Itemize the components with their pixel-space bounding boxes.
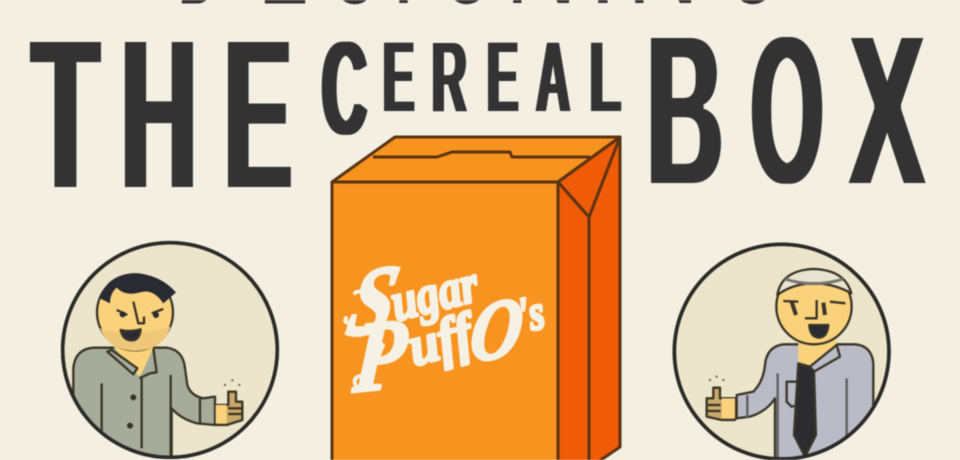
cereal box xyxy=(332,137,620,460)
box side xyxy=(558,137,620,460)
right hair xyxy=(777,269,851,295)
heading: designing (cropped at top) xyxy=(178,0,779,32)
EREAL xyxy=(383,20,621,135)
logo: Sugar Puff O's: ugar xyxy=(384,253,485,333)
right hand thumbs up xyxy=(707,388,735,420)
left collar xyxy=(107,348,157,378)
box top tab xyxy=(373,152,590,157)
logo: Sugar Puff O's: S xyxy=(339,243,408,358)
right tie xyxy=(794,363,816,457)
box front xyxy=(332,182,558,460)
EREAL: R xyxy=(432,20,467,134)
right face xyxy=(783,300,845,318)
left shirt xyxy=(73,348,215,460)
EREAL: E xyxy=(487,20,518,134)
left head xyxy=(97,274,173,350)
left sparkles xyxy=(225,379,239,386)
left neck xyxy=(113,347,153,377)
box side fold xyxy=(558,137,620,460)
logo: Sugar Puff O's: uff xyxy=(401,301,484,379)
logo: Sugar Puff O's: P xyxy=(350,298,411,415)
logo: Sugar Puff O's: 's xyxy=(513,283,549,343)
title: THE: E xyxy=(224,0,292,235)
EREAL: E xyxy=(383,20,414,134)
left hair xyxy=(100,273,176,303)
right sparkles xyxy=(710,376,723,381)
title: CEREAL xyxy=(322,14,621,164)
portrait: left man xyxy=(63,243,277,460)
logo: Sugar Puff O's xyxy=(339,243,549,415)
right collar xyxy=(810,345,840,372)
left hand thumbs up xyxy=(216,392,242,425)
left beard shadow xyxy=(100,327,171,351)
logo: Sugar Puff O's: O xyxy=(466,279,527,381)
EREAL: A xyxy=(536,20,570,134)
left face xyxy=(117,302,163,323)
right head xyxy=(776,269,852,344)
box top xyxy=(332,137,620,182)
title: THE: T xyxy=(32,0,99,236)
right shirt xyxy=(737,344,873,460)
right circle background xyxy=(674,244,889,459)
EREAL: L xyxy=(590,21,621,135)
logo swashes xyxy=(345,292,388,388)
title: BOX xyxy=(647,0,925,232)
left shirt details xyxy=(102,375,200,460)
right neck xyxy=(798,340,837,367)
right pocket xyxy=(787,382,799,407)
title: THE: H xyxy=(121,0,197,236)
portrait: right man xyxy=(674,244,889,460)
large C: C xyxy=(322,14,367,164)
left circle background xyxy=(63,243,277,457)
right shirt details xyxy=(747,373,847,460)
title: THE xyxy=(32,0,292,236)
